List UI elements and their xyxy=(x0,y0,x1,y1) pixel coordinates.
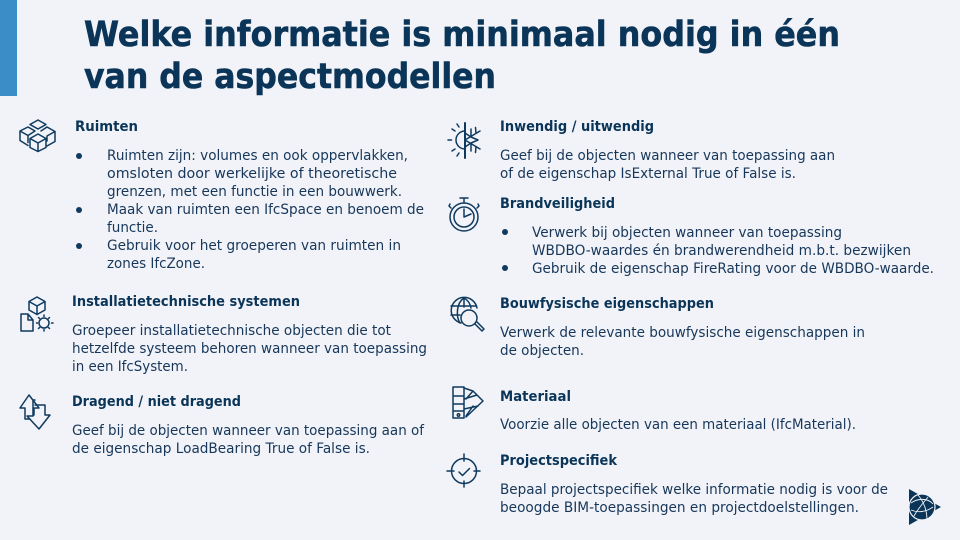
section: Brandveiligheid xyxy=(500,196,934,277)
icon: cubes xyxy=(20,120,55,152)
icon: colour fan xyxy=(453,387,483,418)
icon: sun and snowflake xyxy=(448,123,480,158)
section: Ruimten: omsloten door werkelijke of theoretische xyxy=(107,166,397,182)
icon: up and down arrows xyxy=(20,395,50,429)
section: Brandveiligheid: WBDBO-waardes én brandwerendheid m.b.t. bezwijken xyxy=(532,243,911,259)
section: Inwendig / uitwendig: of de eigenschap IsExternal True of False is. xyxy=(500,166,796,182)
section: Installatietechnische systemen: Groepeer installatietechnische objecten die tot xyxy=(72,323,391,339)
section: Ruimten xyxy=(75,119,424,272)
section: Projectspecifiek xyxy=(500,453,888,516)
section: Materiaal: Materiaal xyxy=(500,389,571,405)
title: Welke informatie is minimaal nodig in één xyxy=(84,15,840,55)
section: Ruimten: Ruimten xyxy=(75,119,138,135)
section: Installatietechnische systemen: in een IfcSystem. xyxy=(72,359,188,375)
section: Materiaal xyxy=(500,389,856,433)
icon: stopwatch xyxy=(449,198,479,231)
section: Ruimten: functie. xyxy=(107,220,158,236)
section: Bouwfysische eigenschappen: Bouwfysische eigenschappen xyxy=(500,296,714,312)
section: Ruimten: Maak van ruimten een IfcSpace en benoem de xyxy=(107,202,424,218)
section: Installatietechnische systemen: hetzelfde systeem behoren wanneer van toepassing xyxy=(72,341,427,357)
section: Installatietechnische systemen xyxy=(72,294,427,375)
section: Dragend / niet dragend: de eigenschap LoadBearing True of False is. xyxy=(72,441,370,457)
title: van de aspectmodellen xyxy=(84,57,496,97)
icon: target with check xyxy=(447,454,480,487)
section: Dragend / niet dragend: Dragend / niet dragend xyxy=(72,394,241,410)
section: Dragend / niet dragend: Geef bij de objecten wanneer van toepassing aan of xyxy=(72,423,425,439)
section: Inwendig / uitwendig xyxy=(500,119,835,182)
icon: logo globe in triangle xyxy=(909,489,941,525)
section: Inwendig / uitwendig: Geef bij de objecten wanneer van toepassing aan xyxy=(500,148,835,164)
section: Dragend / niet dragend xyxy=(72,394,425,457)
section: Installatietechnische systemen: Installatietechnische systemen xyxy=(72,294,300,310)
section: Projectspecifiek: Bepaal projectspecifiek welke informatie nodig is voor de xyxy=(500,482,888,498)
title xyxy=(84,15,840,97)
section: Ruimten: Gebruik voor het groeperen van ruimten in xyxy=(107,238,401,254)
section: Projectspecifiek: beoogde BIM-toepassingen en projectdoelstellingen. xyxy=(500,500,859,516)
section: Brandveiligheid: Verwerk bij objecten wanneer van toepassing xyxy=(532,225,842,241)
section: Ruimten: Ruimten zijn: volumes en ook oppervlakken, xyxy=(107,148,408,164)
section: Bouwfysische eigenschappen: Verwerk de relevante bouwfysische eigenschappen in xyxy=(500,325,865,341)
section: Ruimten: grenzen, met een functie in een bouwwerk. xyxy=(107,184,402,200)
accent bar xyxy=(0,0,17,96)
section: Ruimten: zones IfcZone. xyxy=(107,256,205,272)
section: Inwendig / uitwendig: Inwendig / uitwendig xyxy=(500,119,654,135)
icon: globe with magnifier xyxy=(451,297,484,331)
section: Brandveiligheid: Brandveiligheid xyxy=(500,196,615,212)
section: Materiaal: Voorzie alle objecten van een materiaal (IfcMaterial). xyxy=(500,417,856,433)
section: Bouwfysische eigenschappen: de objecten. xyxy=(500,343,584,359)
section: Projectspecifiek: Projectspecifiek xyxy=(500,453,617,469)
section: Bouwfysische eigenschappen xyxy=(500,296,865,359)
section: Brandveiligheid: Gebruik de eigenschap FireRating voor de WBDBO-waarde. xyxy=(532,261,934,277)
icon: cube, document and sun xyxy=(21,297,53,331)
